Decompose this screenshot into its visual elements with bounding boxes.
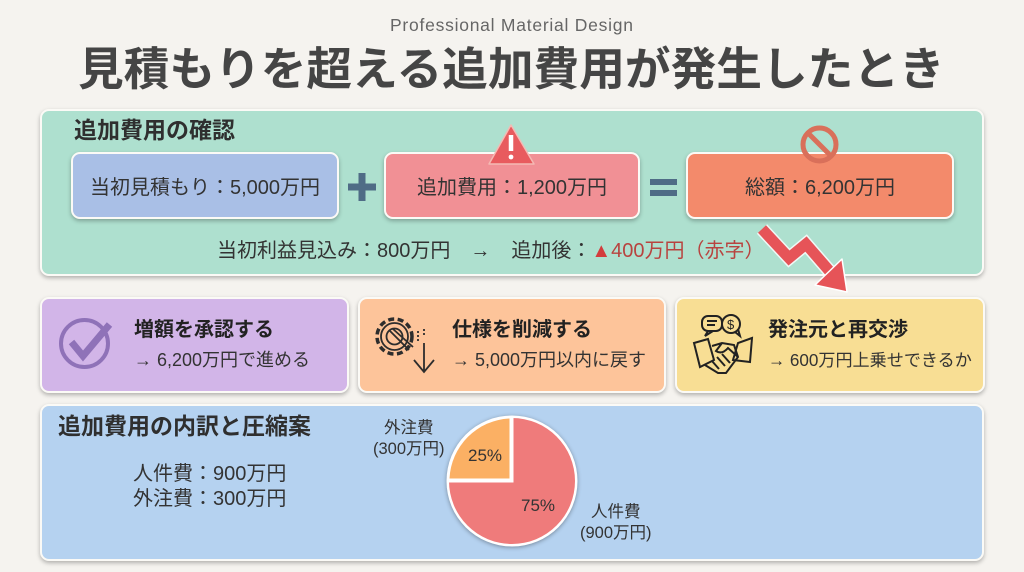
icon: handshake with speech bubbles (692, 314, 754, 374)
heading: 発注元と再交渉 (768, 319, 908, 341)
label: outsourcing: 外注費 (384, 419, 434, 437)
box: initial estimate (71, 152, 339, 219)
panel: reduce spec (358, 297, 666, 393)
icon: handshake with speech bubbles: $ (727, 317, 735, 332)
panel heading: 追加費用の確認 (74, 116, 235, 142)
detail: → 600万円上乗せできるか (768, 350, 972, 370)
label: labor: 人件費 (591, 503, 641, 521)
arrow: falling zigzag (757, 224, 848, 292)
icon: plus (348, 173, 376, 201)
label: outsourcing: (300万円) (373, 440, 445, 458)
icon: prohibited (800, 126, 838, 164)
subtitle: Professional Material Design (390, 14, 634, 34)
icon: check circle (59, 318, 112, 369)
box: additional cost: 追加費用：1,200万円 (417, 177, 607, 199)
box: additional cost (384, 152, 640, 219)
label: labor: (900万円) (580, 524, 652, 542)
panel: renegotiate (675, 297, 985, 393)
panel: confirm additional costs (40, 109, 984, 276)
panel heading: 追加費用の内訳と圧縮案 (58, 412, 311, 438)
cost list: 外注費：300万円 (133, 488, 286, 510)
panel: breakdown (40, 404, 984, 561)
box: total (686, 152, 954, 219)
heading: 増額を承認する (134, 319, 274, 341)
label: 75 percent: 75% (521, 496, 555, 515)
icon: gear and down arrow (375, 317, 435, 374)
cost list (133, 463, 286, 510)
heading: 仕様を削減する (452, 319, 592, 341)
icon: warning triangle (488, 124, 535, 165)
panel: approve increase (40, 297, 349, 393)
detail: → 5,000万円以内に戻す (452, 350, 646, 370)
icon: equals (650, 179, 677, 196)
title: 見積もりを超える追加費用が発生したとき (78, 44, 945, 95)
label: outsourcing (373, 418, 445, 458)
box: initial estimate: 当初見積もり：5,000万円 (90, 177, 320, 199)
label: 25 percent: 25% (468, 446, 502, 465)
pie chart (444, 414, 580, 550)
label: labor (580, 503, 652, 542)
profit line: 当初利益見込み：800万円 → 追加後：▲400万円（赤字） (217, 240, 765, 262)
detail: → 6,200万円で進める (134, 350, 310, 370)
cost list: 人件費：900万円 (133, 463, 286, 485)
box: total: 総額：6,200万円 (745, 177, 895, 199)
